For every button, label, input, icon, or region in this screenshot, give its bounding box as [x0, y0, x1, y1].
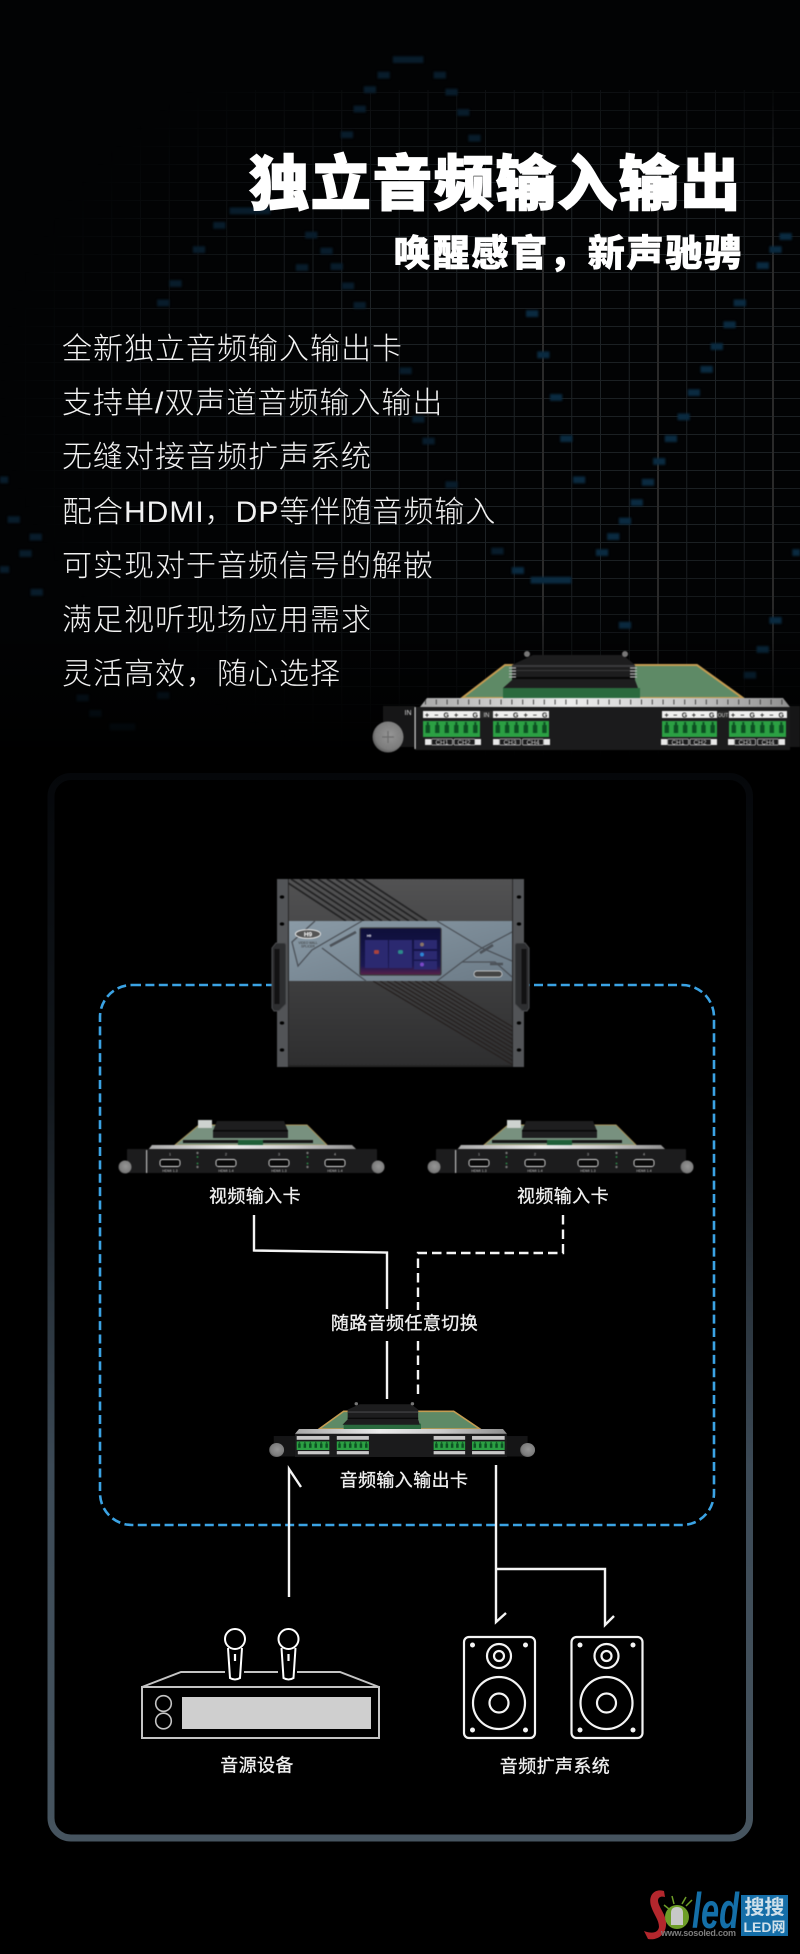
- HDMI ports: [160, 1160, 345, 1166]
- audio source label: 音源设备: [220, 1756, 294, 1776]
- channel labels: CH3: [738, 740, 752, 747]
- top rail: [148, 1145, 357, 1150]
- receiver box: [142, 1687, 379, 1738]
- video input label left: 视频输入卡: [209, 1186, 301, 1206]
- port labels: 3: [587, 1152, 589, 1156]
- IN mark: IN: [404, 710, 412, 717]
- icon: video wall processor chassis: [270, 878, 530, 1068]
- feature text block: 全新独立音频输入输出卡: [62, 333, 403, 366]
- heat sink: [492, 1121, 622, 1145]
- microphones: [225, 1629, 298, 1680]
- panel: rounded frame: [51, 776, 750, 1838]
- channel labels: CH1: [671, 740, 685, 747]
- port labels: [162, 1152, 343, 1173]
- channel labels: CH4: [526, 740, 540, 747]
- heat sink: [503, 651, 638, 688]
- logo badge: [296, 930, 320, 949]
- channel labels: CH4: [761, 740, 775, 747]
- diagram canvas: [48, 650, 800, 1940]
- port labels: HDMI 1.3: [162, 1169, 178, 1173]
- waveform pixel dashes: [0, 56, 800, 730]
- faceplate and ears: [383, 706, 800, 750]
- front band: [289, 921, 512, 981]
- touch screen: H9: [367, 934, 371, 938]
- logo badge: VIDEO WALL: [298, 941, 318, 945]
- port labels: 1: [478, 1152, 480, 1156]
- top rail: [457, 1145, 666, 1150]
- icon: video input card right: [428, 1120, 694, 1174]
- switching label: 随路音频任意切换: [331, 1314, 478, 1334]
- display: [182, 1697, 371, 1729]
- port labels: HDMI 1.4: [327, 1169, 343, 1173]
- PCB: [319, 1411, 480, 1429]
- icon: large audio IO card: [372, 651, 800, 752]
- top label strips: IN: [484, 713, 490, 719]
- chassis ears: [277, 879, 524, 1067]
- thumb screw: [372, 722, 404, 752]
- port labels: HDMI 1.3: [271, 1169, 287, 1173]
- feature text block: 配合HDMI，DP等伴随音频输入: [62, 496, 496, 529]
- feature text block: [62, 333, 496, 691]
- top label strips: [423, 711, 787, 719]
- chassis body: [287, 878, 514, 1068]
- channel labels: CH3: [503, 740, 517, 747]
- connector: dashed line from right video card: [418, 1215, 563, 1399]
- logo box: [741, 1895, 788, 1936]
- top label strips: + − G + − G: [425, 712, 479, 719]
- LEDs: [505, 1152, 618, 1168]
- subtitle: 唤醒感官，新声驰骋: [394, 233, 743, 274]
- icon: audio receiver with microphones: [142, 1629, 379, 1738]
- touch screen: [360, 928, 441, 975]
- icon: video input card left: [118, 1120, 384, 1174]
- icon: audio IO card small: [269, 1402, 535, 1457]
- ears: [274, 1436, 528, 1456]
- thumb screws: [269, 1443, 535, 1457]
- green terminals: [423, 721, 786, 737]
- port labels: HDMI 1.4: [527, 1169, 543, 1173]
- arrow: audio source up to card: [289, 1469, 301, 1597]
- faceplate: [127, 1149, 377, 1173]
- logo letter S: [644, 1890, 666, 1939]
- port labels: 2: [534, 1152, 536, 1156]
- heat sink: [183, 1121, 313, 1145]
- channel labels: CH2: [457, 740, 471, 747]
- thumb screws: [428, 1160, 694, 1174]
- background: grid and waveform: [0, 55, 800, 730]
- top label strips: + − G + − G: [731, 712, 785, 719]
- logo: soled: [644, 1883, 788, 1939]
- port labels: 1: [169, 1152, 171, 1156]
- audio IO card label: 音频输入输出卡: [340, 1470, 468, 1490]
- logo url: www.sosoled.com: [660, 1928, 736, 1938]
- port labels: HDMI 1.3: [580, 1169, 596, 1173]
- port labels: HDMI 1.4: [218, 1169, 234, 1173]
- port labels: 4: [334, 1152, 336, 1156]
- logo letters led: led: [692, 1883, 740, 1939]
- blue dashed boundary: [100, 985, 714, 1525]
- rack handles: [272, 943, 529, 1011]
- PCB: [484, 1125, 636, 1145]
- channel labels: CH1: [435, 740, 449, 747]
- grid lines: [92, 90, 800, 682]
- channel labels: [425, 739, 785, 747]
- port labels: HDMI 1.3: [471, 1169, 487, 1173]
- faceplate: [295, 1434, 507, 1457]
- feature text block: 可实现对于音频信号的解嵌: [62, 550, 434, 583]
- icon: speaker right: [572, 1637, 642, 1738]
- PCB: [175, 1125, 327, 1145]
- logo box text: 搜搜: [744, 1896, 784, 1919]
- port labels: [471, 1152, 652, 1173]
- top label strips: + − G + − G: [494, 712, 548, 719]
- icon: speaker left: [464, 1637, 535, 1738]
- top rail: [295, 1429, 507, 1434]
- top rail: [420, 698, 790, 707]
- knobs: [156, 1696, 171, 1729]
- logo badge: H9: [304, 931, 313, 938]
- label strips: [297, 1436, 505, 1454]
- thumb screws: [118, 1160, 384, 1174]
- feature text block: 无缝对接音频扩声系统: [62, 441, 372, 474]
- speaker system label: 音频扩声系统: [500, 1756, 610, 1776]
- title: 独立音频输入输出: [249, 151, 742, 218]
- terminals: [297, 1441, 505, 1450]
- port labels: 3: [278, 1152, 280, 1156]
- heat sink: [343, 1402, 420, 1425]
- feature text block: 灵活高效，随心选择: [62, 658, 341, 691]
- logo box text line 2: LED网: [744, 1919, 786, 1935]
- video input label right: 视频输入卡: [517, 1186, 609, 1206]
- port labels: HDMI 1.4: [636, 1169, 652, 1173]
- faceplate: [436, 1149, 686, 1173]
- connector: solid line from left video card: [254, 1215, 387, 1399]
- logo badge: SPLICER: [301, 945, 316, 949]
- port labels: 2: [225, 1152, 227, 1156]
- channel labels: CH2: [693, 740, 707, 747]
- port labels: 4: [643, 1152, 645, 1156]
- top label strips: + − G + − G: [664, 712, 715, 719]
- feature text block: 满足视听现场应用需求: [62, 604, 372, 637]
- badge: [474, 971, 502, 977]
- feature text block: 支持单/双声道音频输入输出: [62, 387, 443, 420]
- top label strips: OUT: [718, 713, 728, 719]
- HDMI ports: [469, 1160, 654, 1166]
- PCB: [462, 665, 743, 698]
- LEDs: [196, 1152, 309, 1168]
- LED bulb icon: [664, 1896, 692, 1929]
- arrow: card out to speakers: [496, 1465, 614, 1625]
